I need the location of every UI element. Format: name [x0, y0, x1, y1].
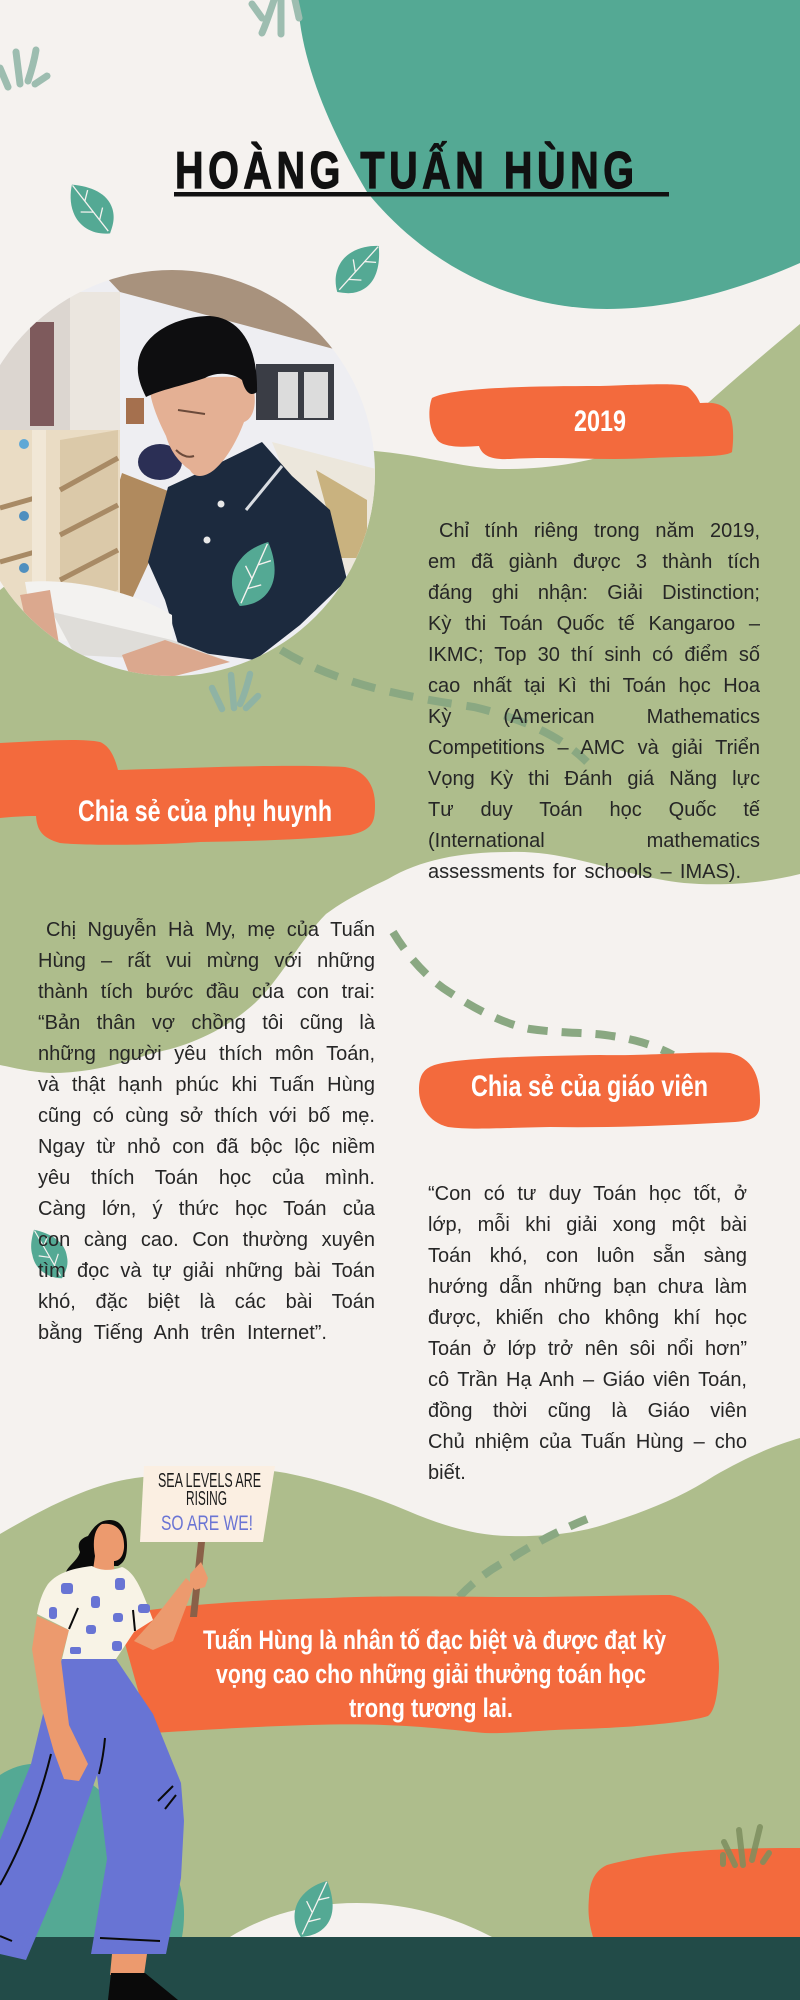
green wave middle: [0, 324, 800, 1073]
text: 2019 achievements: [428, 520, 760, 883]
text: parent sharing: tìm đọc và tự giải những bài Toán: [38, 1260, 375, 1282]
text: teacher sharing: “Con có tư duy Toán học tốt, ở: [428, 1183, 747, 1205]
sign text: SO ARE WE!: [161, 1512, 253, 1535]
dashed line from photo: [281, 650, 587, 762]
text: 2019 achievements: Kỳ thi Toán Quốc tế Kangaroo –: [428, 613, 760, 635]
leaf bottom: [285, 1874, 344, 1945]
photo: boy reading in library: [0, 260, 390, 690]
left arm: [32, 1616, 88, 1781]
grass mark under photo: [212, 674, 258, 709]
dashed line to conclusion: [459, 1519, 587, 1597]
text: parent sharing: và thật hạnh phúc khi Tuấn Hùng: [38, 1074, 375, 1096]
right arm: [134, 1578, 194, 1650]
dark footer band: [0, 1937, 800, 2000]
text: teacher sharing: đồng thời cũng là Giáo viên: [428, 1400, 747, 1422]
boy head: [150, 377, 255, 476]
hair: [66, 1520, 127, 1572]
shirt dots: [49, 1578, 150, 1654]
leg: [110, 1954, 147, 1975]
text: parent sharing: “Bản thân vợ chồng tôi cũng là: [38, 1012, 375, 1034]
conclusion text: trong tương lai.: [349, 1693, 513, 1723]
text: parent sharing: bằng Tiếng Anh trên Internet”.: [38, 1322, 327, 1344]
teal blob behind figure: [0, 1764, 184, 1937]
text: teacher sharing: Toán ở lớp trở nên sôi nổi hơn”: [428, 1338, 747, 1360]
text: parent sharing: thành tích bước đầu của con trai:: [38, 981, 375, 1003]
conclusion blob: [117, 1595, 719, 1733]
text: parent sharing: khó, đặc biệt là các bài Toán: [38, 1291, 375, 1313]
text: parent sharing: cũng có cùng sở thích với bố mẹ.: [38, 1105, 375, 1127]
shoe: [108, 1973, 178, 2000]
conclusion text: [203, 1625, 666, 1723]
pants: [0, 1659, 184, 1960]
heading blob teacher: [419, 1053, 760, 1129]
clothing lines: [0, 1608, 176, 1941]
text: 2019 achievements: Vọng Kỳ thi Đánh giá Năng lực: [428, 768, 760, 790]
open book: [25, 581, 172, 625]
text: teacher sharing: biết.: [428, 1462, 466, 1484]
green hills bottom: [0, 1438, 800, 1940]
text: parent sharing: con càng cao. Con thường xuyên: [38, 1229, 375, 1251]
white hump: [230, 1903, 492, 1937]
text: teacher sharing: cô Trần Hạ Anh – Giáo viên Toán,: [428, 1369, 747, 1391]
heading teacher: Chia sẻ của giáo viên: [471, 1070, 708, 1103]
heading blob 2019: [429, 384, 733, 459]
text: parent sharing: những người yêu thích môn Toán,: [38, 1043, 375, 1065]
sign text: SEA LEVELS ARE: [158, 1470, 261, 1492]
text: teacher sharing: lớp, mỗi khi giải xong một bài: [428, 1214, 747, 1236]
heading blob parent: [0, 740, 375, 845]
leaf beside parent text: [20, 1221, 77, 1286]
text: 2019 achievements: assessments for schools – IMAS).: [428, 861, 741, 883]
text: 2019 achievements: em đã giành được 3 thành tích: [428, 551, 760, 573]
text: parent sharing: Ngay từ nhỏ con đã bộc lộc niềm: [38, 1136, 375, 1158]
text: 2019 achievements: (International mathematics: [428, 830, 760, 852]
conclusion text: vọng cao cho những giải thưởng toán học: [216, 1659, 646, 1689]
face and neck: [93, 1524, 124, 1574]
hand on stick: [190, 1562, 208, 1590]
leaf top left: [58, 173, 125, 244]
text: 2019 achievements: đáng ghi nhận: Giải Distinction;: [428, 582, 760, 604]
grass mark top: [252, 0, 299, 34]
leaf on shirt: [222, 534, 287, 614]
text: parent sharing: Càng lớn, ý thức học Toán của: [38, 1198, 375, 1220]
teal circle top right: [298, 0, 800, 309]
text: parent sharing: Hùng – rất vui mừng với những: [38, 950, 375, 972]
orange corner blob: [588, 1848, 800, 1937]
sign text: [158, 1470, 261, 1535]
boy shirt: [148, 442, 347, 660]
sign stick: [190, 1542, 205, 1617]
text: 2019 achievements: cao nhất tại Kì thi Toán học Hoa: [428, 675, 760, 697]
text: 2019 achievements: Kỳ (American Mathematics: [428, 706, 760, 728]
sign board: [140, 1466, 275, 1542]
heading parent: Chia sẻ của phụ huynh: [78, 795, 332, 828]
heading 2019: 2019: [574, 405, 626, 438]
sign text: RISING: [186, 1488, 227, 1510]
text: 2019 achievements: Chỉ tính riêng trong năm 2019,: [439, 520, 760, 542]
text: parent sharing: yêu thích Toán học của mình.: [38, 1167, 375, 1189]
title: HOÀNG TUẤN HÙNG: [175, 141, 638, 199]
grass mark left: [0, 50, 47, 87]
text: teacher sharing: Toán khó, con luôn sẵn sàng: [428, 1245, 747, 1267]
text: teacher sharing: hướng dẫn những bạn chưa làm: [428, 1276, 747, 1298]
conclusion text: Tuấn Hùng là nhân tố đạc biệt và được đạt kỳ: [203, 1625, 666, 1655]
woman holding sign: [0, 1466, 275, 2000]
text: 2019 achievements: Tư duy Toán học Quốc tế: [428, 799, 760, 821]
text: teacher sharing: Chủ nhiệm của Tuấn Hùng – cho: [428, 1431, 747, 1453]
text: teacher sharing: [428, 1183, 747, 1484]
shirt: [37, 1566, 153, 1659]
leaf top middle: [324, 234, 393, 305]
text: teacher sharing: được, khiến cho không khí học: [428, 1307, 747, 1329]
text: 2019 achievements: IKMC; Top 30 thí sinh có điểm số: [428, 644, 760, 666]
text: parent sharing: [38, 918, 375, 1344]
dashed line to teacher heading: [393, 932, 673, 1055]
grass mark bottom right: [723, 1827, 769, 1865]
text: 2019 achievements: Competitions – AMC và giải Triển: [428, 737, 760, 759]
text: parent sharing: Chị Nguyễn Hà My, mẹ của Tuấn: [46, 919, 375, 941]
